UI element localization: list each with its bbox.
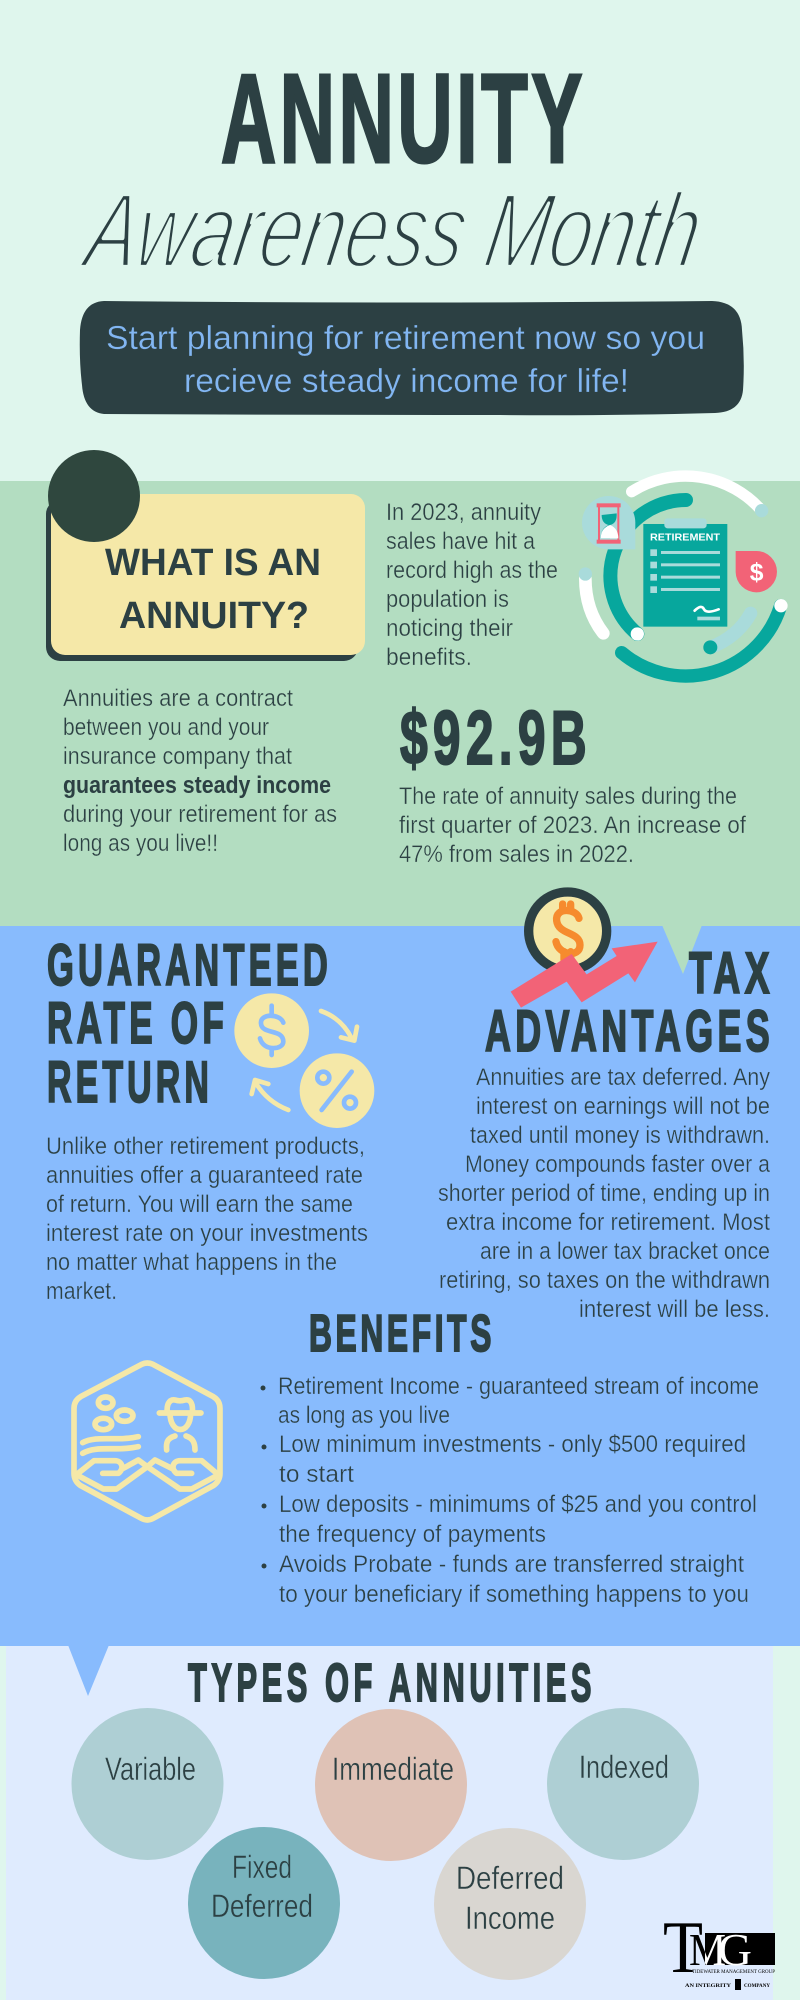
text: guaranteed rate description: no matter what happens in the (46, 1249, 337, 1276)
icon: retirement clipboard: $ (750, 560, 764, 587)
icon: dollar percent exchange (234, 993, 374, 1128)
card: what is an annuity: ANNUITY? (119, 595, 309, 637)
text: guaranteed rate description: interest rate on your investments (46, 1220, 368, 1247)
text: tax advantages description (438, 1064, 771, 1323)
list: benefits: Avoids Probate - funds are transferred straight (279, 1551, 744, 1578)
circle: indexed (547, 1708, 699, 1860)
text: tax advantages description: interest will be less. (579, 1296, 770, 1323)
panel: types of annuities (6, 1646, 773, 2000)
card: what is an annuity (46, 450, 365, 661)
circle: variable: Variable (105, 1751, 196, 1787)
panel: what is an annuity background (0, 481, 800, 926)
circle: fixed deferred: Deferred (211, 1888, 313, 1924)
list: benefits: Low deposits - minimums of $25 and you control (279, 1491, 757, 1518)
text: guaranteed rate description: of return. You will earn the same (46, 1191, 353, 1218)
text: rate of sales (399, 783, 746, 868)
text: what annuities are: guarantees steady income (63, 772, 331, 799)
text: what annuities are: between you and your (63, 714, 269, 741)
logo: TMG: M (689, 1924, 726, 1975)
heading: benefits: BENEFITS (309, 1305, 495, 1363)
text: what annuities are (63, 685, 337, 857)
logo: TMG: M (689, 1924, 726, 1975)
logo: TMG: G (718, 1924, 752, 1975)
circle: indexed: Indexed (579, 1749, 669, 1785)
circle: fixed deferred: Fixed (232, 1849, 292, 1885)
list: benefits: Low minimum investments - only $500 required (279, 1431, 746, 1458)
text: record sales: record high as the (386, 557, 558, 584)
heading: guaranteed rate of return: GUARANTEED (47, 933, 332, 998)
panel: blue middle section (0, 926, 800, 1646)
text: record sales: In 2023, annuity (386, 499, 541, 526)
circle: deferred income: Deferred (456, 1860, 564, 1896)
text: guaranteed rate description: Unlike other retirement products, (46, 1133, 365, 1160)
text: tax advantages description: are in a lower tax bracket once (480, 1238, 770, 1265)
text: tax advantages description: Annuities are tax deferred. Any (476, 1064, 770, 1091)
card: what is an annuity: WHAT IS AN (105, 542, 321, 584)
text: tax advantages description: interest on earnings will not be (476, 1093, 770, 1120)
text: rate of sales: 47% from sales in 2022. (399, 841, 634, 868)
circle: fixed deferred (188, 1827, 340, 1979)
logo: TMG: COMPANY (744, 1983, 770, 1989)
logo: TMG (664, 1923, 775, 1990)
heading: tax advantages (485, 941, 774, 1064)
text: record sales: sales have hit a (386, 528, 536, 555)
logo: TMG: T (663, 1907, 703, 1989)
text: guaranteed rate description: market. (46, 1278, 117, 1305)
icon: retirement clipboard (579, 476, 788, 676)
circle: deferred income: Income (465, 1900, 555, 1936)
text: tax advantages description: extra income for retirement. Most (446, 1209, 770, 1236)
statistic: $92.9B: $92.9B (400, 696, 592, 781)
list: benefits: the frequency of payments (279, 1521, 546, 1548)
list: benefits: Retirement Income - guaranteed stream of income (278, 1373, 759, 1400)
text: record sales: noticing their (386, 615, 513, 642)
text: what annuities are: Annuities are a contract (63, 685, 293, 712)
text: tax advantages description: retiring, so taxes on the withdrawn (439, 1267, 770, 1294)
circle: immediate: Immediate (332, 1751, 454, 1787)
list: benefits: as long as you live (278, 1402, 450, 1429)
text: rate of sales: first quarter of 2023. An increase of (399, 812, 746, 839)
text: guaranteed rate description (46, 1133, 368, 1305)
circle: deferred income (434, 1828, 586, 1980)
heading: guaranteed rate of return (47, 933, 332, 1115)
circle: variable (72, 1708, 224, 1860)
text: what annuities are: during your retirement for as (63, 801, 337, 828)
logo: TMG: TIDEWATER MANAGEMENT GROUP (692, 1970, 775, 1975)
icon: retirement clipboard: RETIREMENT (650, 532, 721, 543)
pointer: blue speech tail (68, 1645, 109, 1696)
icon: hands with coins and person (74, 1363, 220, 1520)
text: record sales: population is (386, 586, 509, 613)
text: tax advantages description: Money compounds faster over a (465, 1151, 771, 1178)
list: benefits (260, 1373, 759, 1608)
circle: immediate (315, 1709, 467, 1861)
banner: start planning: recieve steady income for life! (184, 362, 629, 399)
text: rate of sales: The rate of annuity sales during the (399, 783, 737, 810)
text: what annuities are: insurance company that (63, 743, 292, 770)
banner: start planning: Start planning for retirement now so you (106, 319, 705, 356)
pointer: green speech tail (662, 925, 702, 974)
list: benefits: to start (279, 1461, 354, 1488)
logo: TMG: AN INTEGRITY (685, 1983, 731, 1989)
text: what annuities are: long as you live!! (63, 830, 218, 857)
text: tax advantages description: taxed until money is withdrawn. (470, 1122, 770, 1149)
heading: guaranteed rate of return: RETURN (47, 1050, 213, 1115)
banner: start planning (80, 301, 744, 415)
text: record sales: benefits. (386, 644, 472, 671)
text: tax advantages description: shorter period of time, ending up in (438, 1180, 770, 1207)
list: benefits: to your beneficiary if something happens to you (279, 1581, 749, 1608)
heading: guaranteed rate of return: RATE OF (47, 991, 228, 1056)
text: record sales (386, 499, 558, 671)
text: guaranteed rate description: annuities offer a guaranteed rate (46, 1162, 363, 1189)
icon: coin and rising arrow (511, 892, 658, 1008)
